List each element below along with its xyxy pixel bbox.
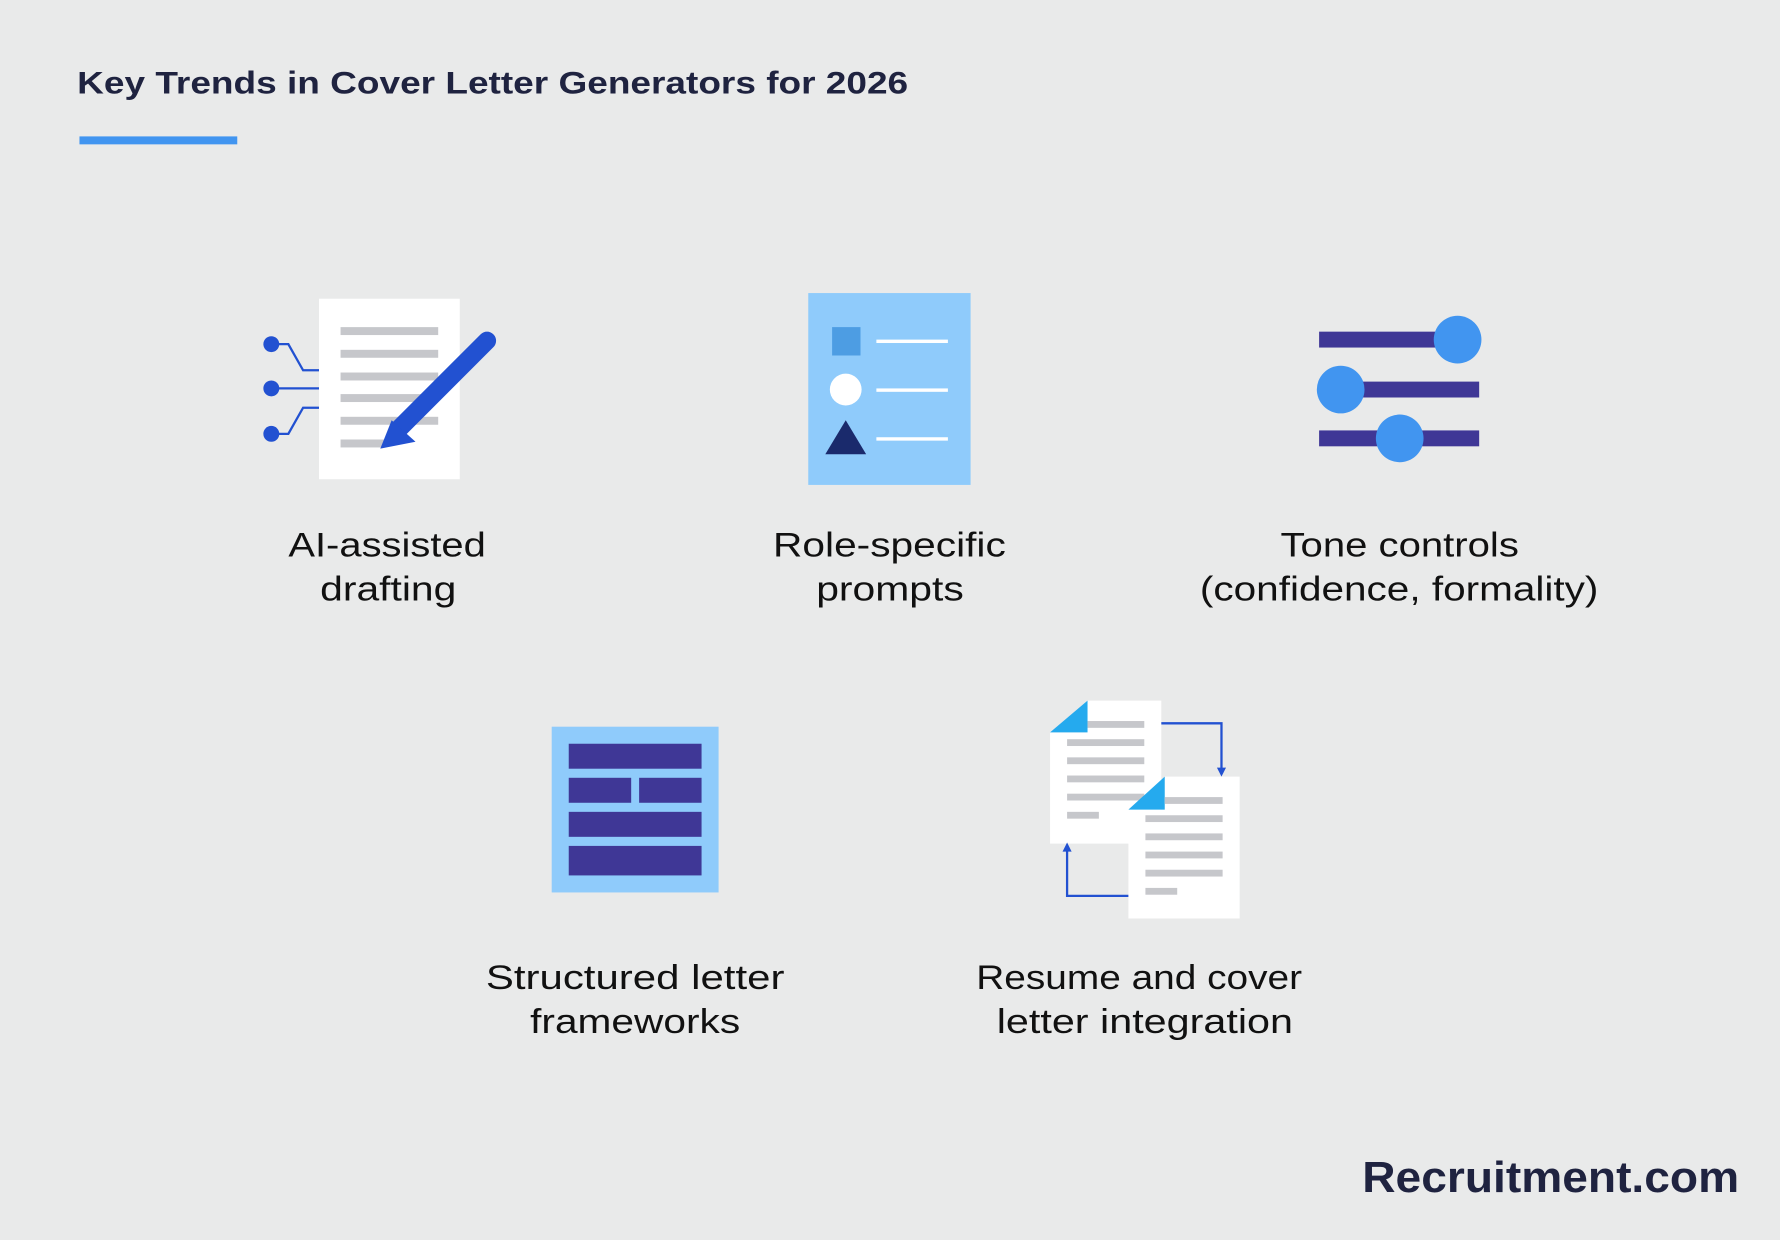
label: Structured letter frameworks: frameworks — [530, 1003, 740, 1041]
label: Resume and cover letter integration: Resume and cover — [976, 959, 1302, 997]
label: Resume and cover letter integration: letter integration — [997, 1003, 1293, 1041]
logo: Recruitment.com: Recruitment.com — [1362, 1154, 1739, 1202]
label: AI-assisted drafting: drafting — [320, 571, 456, 609]
label: Role-specific prompts: Role-specific — [773, 526, 1006, 564]
label: Structured letter frameworks: Structured letter — [486, 959, 784, 997]
icon: tone controls — [1317, 316, 1481, 462]
title: Key Trends in Cover Letter Generators for 2026 — [77, 64, 908, 100]
icon: role-specific prompts — [808, 293, 971, 485]
label: AI-assisted drafting: AI-assisted — [288, 526, 486, 564]
icon: resume and cover letter integration — [1050, 701, 1240, 919]
icon: AI-assisted drafting — [263, 299, 487, 479]
label: Role-specific prompts: prompts — [816, 571, 964, 609]
label: Tone controls: (confidence, formality) — [1200, 571, 1598, 609]
label: Tone controls: Tone controls — [1281, 526, 1519, 564]
title underline — [79, 136, 237, 144]
icon: structured frameworks — [552, 727, 719, 892]
